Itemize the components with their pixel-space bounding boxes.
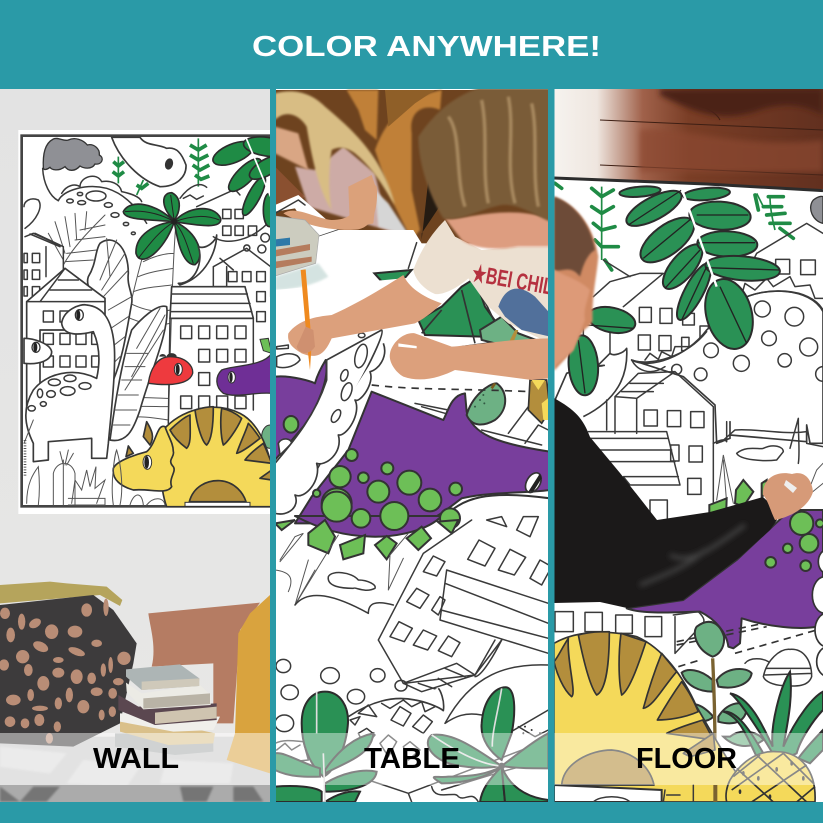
label: TABLE: TABLE [364,743,460,775]
dark green bottom leaves [275,687,548,802]
panel: table [275,88,555,803]
photo: children coloring at table [275,88,555,523]
label strip: floor [554,733,823,785]
label: WALL: WALL [93,743,179,775]
man's head [554,197,598,370]
panel: floor [554,89,823,803]
shirt lettering: ★BEI CHIL [470,260,555,300]
label strip: wall [0,733,270,785]
coloring poster on wall [18,130,291,514]
dinosaur neck [275,330,382,513]
icon: red dinosaur [148,353,193,385]
title banner [0,0,823,89]
icon: purple dinosaur [217,338,272,395]
stegosaurus outline [632,277,823,443]
boy's right arm and hand [390,333,550,380]
photo: wooden floor [554,89,823,189]
boy's left arm with pencil [288,269,442,370]
title: COLOR ANYWHERE! [252,31,601,63]
paper white area [276,278,536,346]
coloring poster lower area [554,510,823,803]
boy's t-shirt, hair and face [413,88,555,343]
label: FLOOR: FLOOR [636,743,737,775]
panel: wall [0,89,291,803]
dinosaur belly [295,516,442,537]
coloring poster on floor [554,177,823,523]
yellow triceratops body [554,632,737,803]
room scene: basket, pillow, books, chair, rug [0,582,272,803]
man's arm in black sleeve with hand [554,398,813,608]
icon: yellow triceratops [113,407,272,507]
label strip: table [276,733,548,785]
pineapple [723,672,823,802]
coloring poster lower area [275,492,552,802]
plant with teal leaves [682,622,763,753]
fern leaf [567,184,781,396]
